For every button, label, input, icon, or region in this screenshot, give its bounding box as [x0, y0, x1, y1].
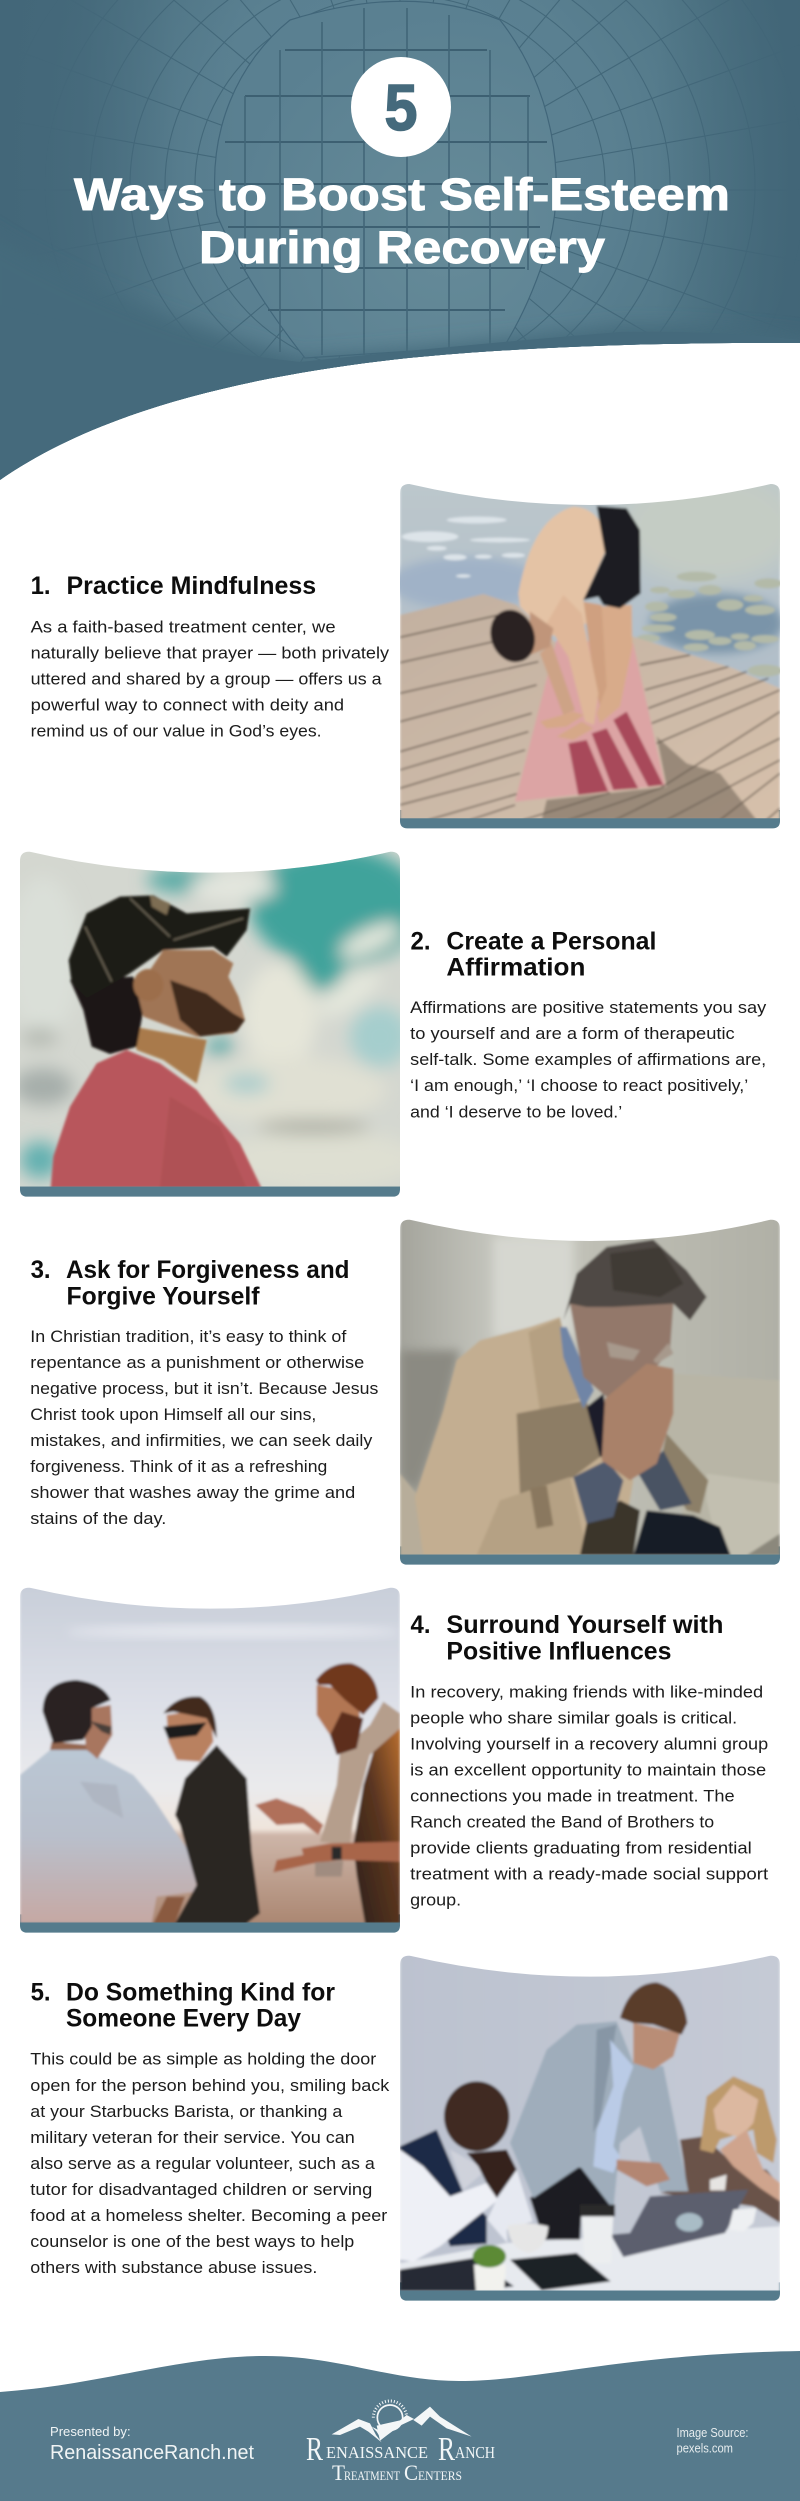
dark lower wave of header	[0, 315, 730, 480]
hair	[563, 1240, 707, 1320]
standing man: face	[633, 2023, 680, 2070]
body: tip 2: self-talk. Some examples of affirmations are,	[410, 1051, 766, 1069]
dark laptop	[400, 2258, 514, 2291]
body: tip 3	[30, 1328, 378, 1528]
body: tip 5: This could be as simple as holding the door	[30, 2051, 377, 2069]
logo: Renaissance Ranch Treatment Centers: ENAISSANCE	[326, 2443, 428, 2462]
cap	[66, 894, 252, 982]
heading: tip 3	[31, 1256, 349, 1310]
heading: tip 2: Create a Personal	[446, 927, 656, 955]
logo: Renaissance Ranch Treatment Centers: REATMENT	[344, 2468, 400, 2483]
middle man: jacket	[175, 1745, 260, 1923]
photo: three colleagues around a laptop	[400, 1953, 780, 2301]
body: tip 4: connections you made in treatment. The	[410, 1788, 735, 1806]
panel: tip 5 text	[30, 1978, 390, 2277]
header background: skylight dome grid	[0, 0, 800, 480]
table	[400, 2226, 780, 2291]
footer: image source: pexels.com	[676, 2442, 733, 2456]
heading: tip 3: Forgive Yourself	[66, 1282, 260, 1310]
sky and clouds	[20, 852, 400, 1186]
skylight grid bars	[222, 50, 548, 310]
body: tip 2: Affirmations are positive statements you say	[410, 999, 767, 1017]
body: tip 4: people who share similar goals is critical.	[410, 1710, 737, 1728]
left man: hand	[467, 2150, 517, 2198]
ear	[133, 969, 163, 1001]
heading: tip 2: Affirmation	[446, 954, 585, 982]
footer: presented by: Presented by:	[50, 2424, 131, 2439]
central skylight panel	[215, 1, 556, 358]
heading: tip 1: Practice Mindfulness	[66, 572, 316, 600]
woman: hair	[700, 2076, 777, 2163]
standing man: shirt	[593, 2040, 633, 2173]
body: tip 3: Christ took upon Himself all our sins,	[30, 1406, 316, 1424]
body: tip 3: negative process, but it isn’t. Because Jesus	[30, 1380, 378, 1398]
person shadow on dock	[542, 737, 757, 820]
title: During Recovery	[199, 222, 605, 273]
woman: jacket	[660, 2136, 780, 2223]
body: tip 4: In recovery, making friends with like-minded	[410, 1684, 763, 1702]
hands	[540, 712, 593, 740]
middle man: sunglasses	[163, 1722, 207, 1739]
heading: tip 4	[410, 1611, 723, 1665]
body: tip 5: tutor for disadvantaged children or serving	[30, 2181, 372, 2199]
logo: Renaissance Ranch Treatment Centers: ANCH	[455, 2443, 495, 2462]
body: tip 3: mistakes, and infirmities, we can seek daily	[30, 1432, 373, 1450]
face	[137, 950, 245, 1037]
neck and ear	[530, 612, 553, 655]
logo: Renaissance Ranch Treatment Centers: C	[404, 2460, 418, 2485]
panel: tip 3 text	[30, 1256, 378, 1528]
badge: number 5	[351, 57, 451, 157]
logo: Renaissance Ranch Treatment Centers: T	[332, 2460, 346, 2485]
tablet	[510, 2253, 611, 2290]
body: tip 3: forgiveness. Think of it as a refreshing	[30, 1458, 327, 1476]
dock	[400, 594, 780, 820]
sleeves	[573, 1460, 623, 1524]
badge: number 5: 5	[384, 71, 418, 144]
heading: tip 5: Do Something Kind for	[66, 1978, 335, 2006]
panel: tip 2 text	[410, 927, 767, 1121]
glasses	[607, 1342, 673, 1364]
plant pot	[474, 2265, 506, 2291]
shorts	[583, 506, 641, 608]
dark left wall	[400, 1350, 460, 1494]
water highlights	[402, 517, 530, 578]
right man: body	[353, 1725, 400, 1923]
body: tip 5: also serve as a regular volunteer, such as a	[30, 2155, 376, 2173]
dock plank lines	[400, 612, 780, 820]
left man: skin	[50, 1742, 98, 1758]
body: tip 2: ‘I am enough,’ ‘I choose to react positively,’	[410, 1077, 748, 1095]
standing man: hand	[617, 2160, 670, 2186]
beard	[170, 980, 245, 1037]
footer: presented by	[50, 2424, 254, 2464]
body: tip 1: uttered and shared by a group — offers us a	[31, 670, 382, 688]
curly hair	[70, 977, 143, 1054]
body: tip 5: military veteran for their service. You can	[30, 2129, 355, 2147]
body: tip 4: is an excellent opportunity to maintain those	[410, 1762, 766, 1780]
logo: Renaissance Ranch Treatment Centers	[306, 2401, 495, 2485]
body: tip 2	[410, 999, 767, 1121]
logo: Renaissance Ranch Treatment Centers: ENTERS	[418, 2468, 462, 2483]
heading: tip 2: 2.	[410, 927, 430, 955]
neck	[133, 1027, 207, 1083]
legs	[583, 602, 608, 707]
sofa	[670, 1376, 685, 1450]
shirt	[51, 1050, 262, 1188]
heading: tip 3: Ask for Forgiveness and	[66, 1256, 350, 1284]
tie	[586, 1392, 606, 1458]
left man: shirt	[20, 1750, 197, 1923]
dark trousers	[633, 1510, 731, 1555]
shadow between coat and trousers	[580, 1500, 640, 1555]
woman: hand	[720, 2130, 780, 2201]
footer: image source: Image Source:	[676, 2426, 748, 2440]
footer: presented by: RenaissanceRanch.net	[50, 2442, 254, 2464]
shirt collar	[560, 1327, 594, 1409]
body: tip 4	[410, 1684, 769, 1910]
icon: mountains and sun	[332, 2401, 472, 2442]
title	[74, 169, 730, 273]
heading: tip 3: 3.	[31, 1256, 51, 1284]
panel: tip 4 text	[410, 1611, 769, 1910]
heading: tip 2	[410, 927, 656, 982]
body: tip 3: stains of the day.	[30, 1510, 166, 1528]
body: tip 5: at your Starbucks Barista, or thanking a	[30, 2103, 343, 2121]
cups	[728, 2208, 757, 2231]
heading: tip 5: Someone Every Day	[66, 2004, 301, 2032]
body: tip 4: provide clients graduating from residential	[410, 1840, 752, 1858]
photo: three friends talking at sunset	[20, 1585, 400, 1933]
title: Ways to Boost Self-Esteem	[74, 169, 730, 220]
body: tip 2: and ‘I deserve to be loved.’	[410, 1103, 622, 1121]
standing man: hair	[620, 1982, 687, 2035]
body: tip 3: shower that washes away the grime and	[30, 1484, 355, 1502]
heading: tip 5: 5.	[31, 1978, 51, 2006]
far arm	[540, 643, 575, 715]
face	[570, 1304, 673, 1397]
heading: tip 5	[31, 1978, 335, 2032]
dome rings	[108, 0, 721, 424]
hair	[488, 608, 536, 664]
body: tip 3: repentance as a punishment or otherwise	[30, 1354, 364, 1372]
panel: tip 1 text	[31, 572, 390, 740]
photo: man in trench coat praying	[400, 1217, 780, 1567]
left man: hair	[43, 1680, 111, 1743]
right man: beard	[330, 1712, 363, 1755]
photo: man in cap looking up at sky	[20, 852, 400, 1197]
footer band	[0, 2351, 800, 2501]
yoga mat	[515, 640, 665, 802]
left man: head	[444, 2081, 509, 2151]
middle man: face	[167, 1708, 213, 1762]
heading: tip 4: 4.	[410, 1611, 430, 1639]
standing man: trousers	[530, 2166, 613, 2240]
dome radial lines	[118, 0, 726, 416]
body: tip 3: In Christian tradition, it’s easy to think of	[30, 1328, 347, 1346]
body: tip 4: Involving yourself in a recovery alumni group	[410, 1736, 768, 1754]
right man: scarf	[320, 1702, 400, 1845]
body: tip 1	[31, 619, 390, 740]
logo: Renaissance Ranch Treatment Centers: R	[306, 2431, 323, 2468]
middle man: hair	[163, 1697, 217, 1738]
body: tip 4: treatment with a ready-made social support	[410, 1866, 769, 1884]
left man: glasses	[90, 1721, 112, 1735]
woman: face	[713, 2085, 758, 2138]
body: tip 5: counselor is one of the best ways to help	[30, 2233, 354, 2251]
body: tip 5: open for the person behind you, smiling back	[30, 2077, 390, 2095]
left man: shirt	[400, 2150, 498, 2261]
right man: face	[317, 1685, 360, 1748]
body: tip 5	[30, 2051, 390, 2277]
belt strap	[530, 1485, 553, 1529]
sofa arm	[400, 1474, 422, 1554]
logo: Renaissance Ranch Treatment Centers: R	[438, 2431, 455, 2468]
hands	[602, 1364, 673, 1480]
body: tip 1: remind us of our value in God’s eyes.	[31, 722, 322, 740]
left man: vest	[400, 2130, 487, 2246]
body: tip 4: group.	[410, 1892, 461, 1910]
standing man: jacket	[510, 2021, 688, 2210]
body: tip 1: As a faith-based treatment center, we	[31, 619, 336, 637]
body: tip 4: Ranch created the Band of Brothers to	[410, 1814, 714, 1832]
body: tip 1: powerful way to connect with deity and	[31, 696, 344, 714]
coat	[415, 1317, 633, 1555]
photo: man in forward fold on dock	[400, 484, 780, 828]
body: tip 5: others with substance abuse issues.	[30, 2259, 317, 2277]
heading: tip 4: Positive Influences	[446, 1637, 671, 1665]
right man: arms	[255, 1798, 323, 1835]
middle man: arm	[153, 1897, 185, 1923]
lily pads	[637, 572, 782, 677]
body: tip 1: naturally believe that prayer — both privately	[31, 645, 390, 663]
heading: tip 1: 1.	[31, 572, 51, 600]
body: tip 2: to yourself and are a form of therapeutic	[410, 1025, 735, 1043]
right coat sleeve	[660, 1434, 708, 1514]
right man: hair	[316, 1663, 378, 1715]
near arm	[547, 595, 598, 725]
footer: image source	[676, 2426, 748, 2456]
torso	[518, 507, 607, 637]
laptop	[611, 2190, 748, 2257]
body: tip 5: food at a homeless shelter. Becoming a peer	[30, 2207, 388, 2225]
heading: tip 4: Surround Yourself with	[446, 1611, 723, 1639]
